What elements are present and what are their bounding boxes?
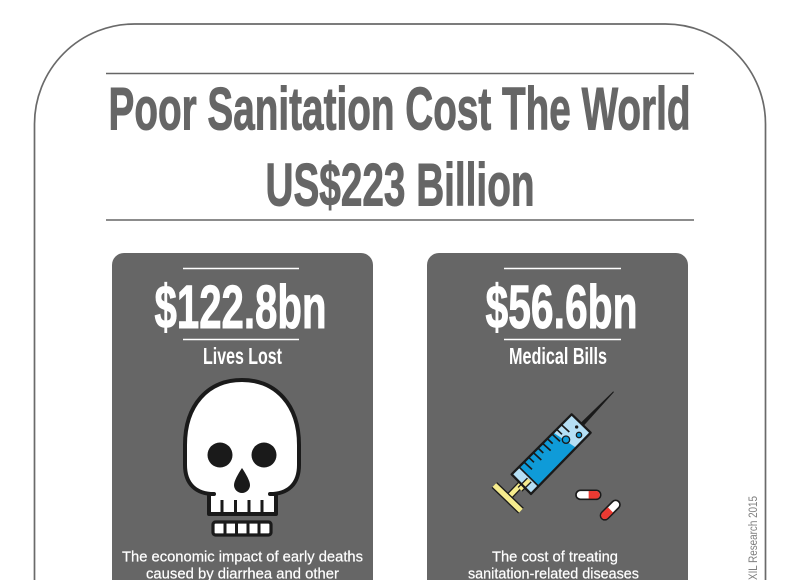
description: medical bills: The cost of treating [492, 550, 618, 566]
source credit: XIL Research 2015 [748, 496, 760, 580]
heading: lives lost: Lives Lost [203, 343, 282, 369]
icon: syringe and pills [494, 392, 622, 522]
heading: medical bills: Medical Bills [509, 343, 607, 369]
title block: US$223 Billion [266, 152, 534, 218]
description: medical bills [468, 550, 639, 580]
amount: lives lost: $122.8bn [154, 273, 326, 341]
panel: medical bills [427, 253, 688, 580]
title block [106, 74, 694, 220]
description: lives lost: The economic impact of early deaths [122, 550, 363, 566]
amount: medical bills: $56.6bn [486, 273, 638, 341]
icon: skull [185, 380, 299, 535]
panel: lives lost [112, 253, 373, 580]
description: lives lost [122, 550, 363, 580]
